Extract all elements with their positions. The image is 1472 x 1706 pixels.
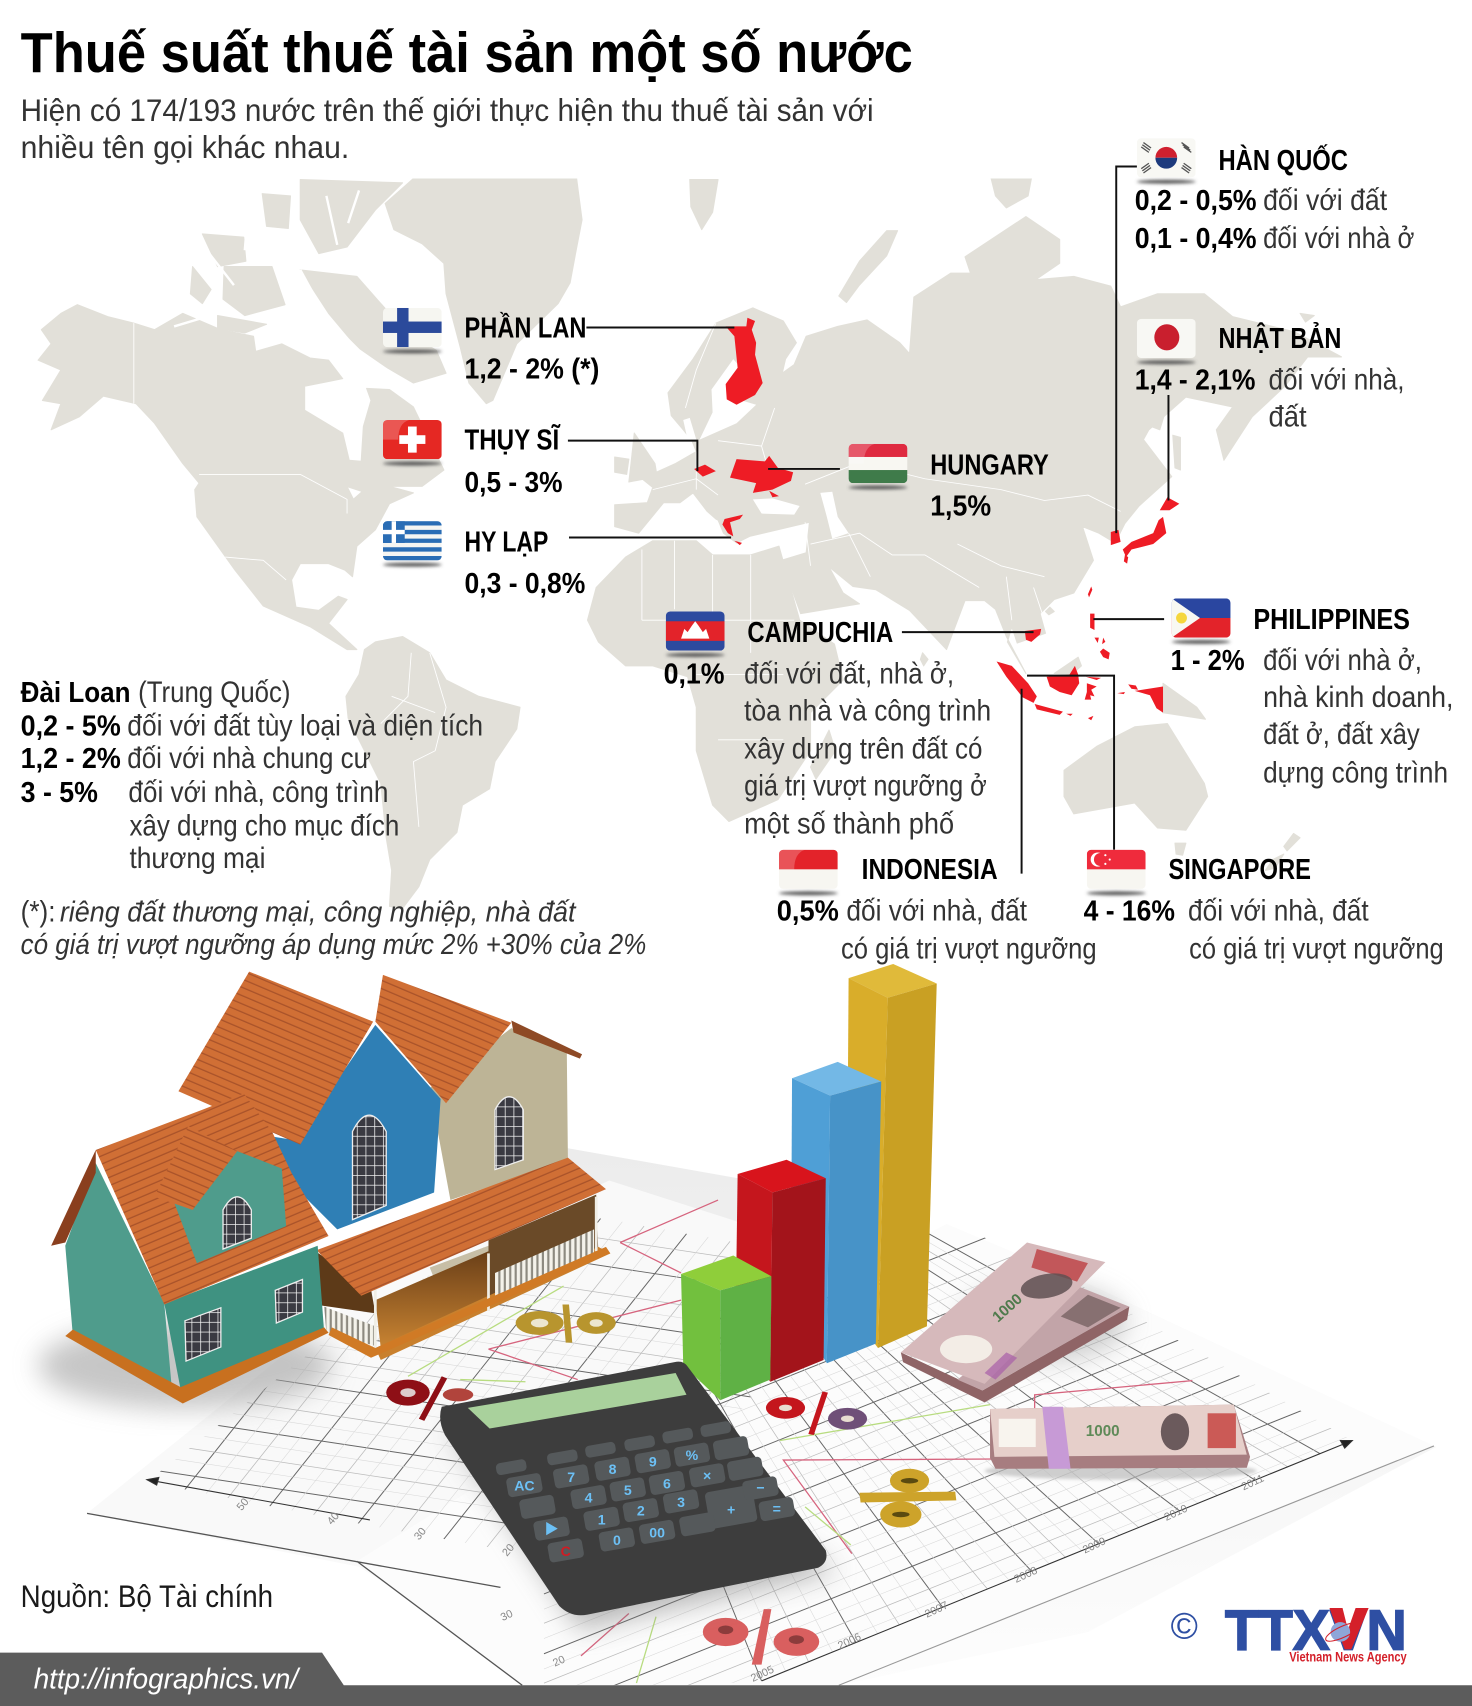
- gold percent centre: [859, 1469, 956, 1528]
- logo: TTXVN: [1171, 1598, 1407, 1664]
- panel: Hy Lạp: HY LẠP: [465, 526, 548, 558]
- panel: Nhật Bản: đất: [1269, 401, 1307, 434]
- subtitle: nhiều tên gọi khác nhau.: [21, 129, 349, 165]
- porch roof: [317, 1158, 606, 1296]
- flag: Philippines: [1172, 598, 1230, 644]
- right chart paper: [357, 1224, 1434, 1685]
- Cambodia: [1025, 629, 1041, 642]
- panel: Hungary: HUNGARY: [930, 448, 1049, 480]
- green house left wall: [65, 1163, 172, 1389]
- axis tick labels: 30: [499, 1608, 515, 1624]
- calculator key labels: C: [561, 1543, 571, 1559]
- dormer roof: [154, 1126, 237, 1210]
- banknotes: [901, 1242, 1257, 1480]
- axis tick labels: 2005: [749, 1664, 776, 1685]
- agency tagline: Vietnam News Agency: [1289, 1648, 1407, 1664]
- land: Australia, New Guinea and islands: [811, 607, 1300, 870]
- panel: Indonesia: có giá trị vượt ngưỡng: [841, 933, 1097, 966]
- calculator key labels: AC: [514, 1478, 535, 1494]
- axis tick labels: [235, 1473, 1266, 1685]
- panel: Philippines: đất ở, đất xây: [1263, 718, 1420, 751]
- panel: Đài Loan: xây dựng cho mục đích: [129, 810, 399, 843]
- gold percent near house: [516, 1305, 616, 1343]
- panel: Hungary: [849, 444, 1049, 522]
- subtitle: [21, 92, 874, 165]
- porch back left: [316, 1251, 375, 1313]
- porch railing left: [324, 1307, 375, 1346]
- calculator keys: [495, 1421, 796, 1563]
- panel: Phần Lan: 1,2 - 2% (*): [465, 353, 599, 385]
- left chart grid: [160, 1211, 752, 1551]
- footnote: (*):: [21, 896, 55, 929]
- Indonesia: [997, 662, 1163, 720]
- calculator key labels: ▶: [545, 1521, 559, 1537]
- axis tick labels: 2009: [1081, 1535, 1108, 1556]
- second main roof: [375, 975, 511, 1103]
- banknote shadow: [963, 1284, 1126, 1360]
- flag: Hungary: [849, 444, 907, 489]
- green house eave: [51, 1150, 96, 1246]
- footnote: riêng đất thương mại, công nghiệp, nhà đất: [60, 896, 577, 928]
- calculator key labels: 1: [598, 1511, 606, 1527]
- calculator key labels: 4: [585, 1490, 593, 1506]
- calculator body: [440, 1362, 827, 1615]
- panel: Hàn Quốc: 0,1 - 0,4%: [1135, 222, 1257, 254]
- left paper edges: [87, 1513, 522, 1685]
- panel: Đài Loan: Đài Loan: [21, 676, 131, 708]
- blue wing wall: [268, 1025, 441, 1229]
- flag: Switzerland: [383, 420, 442, 465]
- panel: Thụy Sĩ: 0,5 - 3%: [465, 466, 562, 498]
- panel: Hungary: 1,5%: [930, 490, 991, 522]
- source: Nguồn: Bộ Tài chính: [21, 1578, 273, 1614]
- panel: Indonesia: INDONESIA: [862, 853, 998, 885]
- axis tick labels: 2006: [836, 1631, 863, 1652]
- green house right wall: [164, 1246, 324, 1389]
- banknote bundle: [985, 1405, 1257, 1480]
- right paper edge: [839, 1446, 1434, 1685]
- red bar: [735, 1160, 826, 1382]
- panel: Campuchia: tòa nhà và công trình: [744, 694, 991, 727]
- Czech shape for Thụy Sĩ: [694, 465, 716, 477]
- South Korea: [1111, 530, 1121, 545]
- axis tick labels: 40: [325, 1510, 342, 1527]
- blue bar: [791, 1062, 881, 1363]
- land: islands of the north and Europe: [615, 178, 1314, 482]
- panel: Phần Lan: [383, 308, 599, 385]
- porch posts: [375, 1197, 596, 1349]
- Japan: [1123, 497, 1179, 564]
- axis tick labels: 2007: [923, 1599, 950, 1621]
- subtitle: Hiện có 174/193 nước trên thế giới thực hiện thu thuế tài sản với: [21, 92, 874, 128]
- footnote: có giá trị vượt ngưỡng áp dụng mức 2% +30% của 2%: [21, 928, 646, 960]
- panel: Hy Lạp: 0,3 - 0,8%: [465, 567, 585, 599]
- panel: Nhật Bản: [1135, 319, 1405, 434]
- panel: Nhật Bản: NHẬT BẢN: [1219, 322, 1341, 354]
- axis tick labels: 50: [235, 1496, 252, 1513]
- arctic channels: [174, 190, 387, 368]
- dormer wall: [174, 1151, 286, 1263]
- porch room wall: [430, 1246, 488, 1295]
- panel: Philippines: nhà kinh doanh,: [1263, 681, 1454, 714]
- flag: Cambodia: [666, 611, 725, 657]
- panel: Singapore: SINGAPORE: [1168, 853, 1311, 885]
- roof ridge and eave of beige wing: [511, 1021, 582, 1059]
- panel: Campuchia: 0,1%: [664, 657, 725, 689]
- house illustration: [38, 972, 610, 1409]
- panel: Thụy Sĩ: [383, 420, 562, 498]
- fanned banknotes: 1000: [989, 1291, 1026, 1326]
- axis tick labels: 20: [500, 1542, 517, 1559]
- flag: Indonesia: [779, 850, 838, 895]
- calculator screen: [468, 1373, 686, 1429]
- panel: Hàn Quốc: đối với đất: [1263, 184, 1387, 217]
- panel: Hàn Quốc: [1135, 138, 1414, 255]
- window: blue wing arch: [352, 1115, 386, 1220]
- sea cut-outs: [348, 359, 849, 539]
- calculator key labels: −: [756, 1480, 765, 1496]
- axis tick labels: 2008: [1012, 1565, 1039, 1586]
- chart axis arrows: [147, 1440, 1352, 1681]
- footer band: [0, 1653, 1472, 1706]
- calculator key labels: 6: [663, 1475, 671, 1491]
- calculator key labels: 5: [624, 1482, 632, 1498]
- calculator key labels: 9: [649, 1454, 657, 1470]
- panel: Philippines: [1171, 598, 1454, 789]
- panel: Campuchia: đối với đất, nhà ở,: [744, 657, 954, 690]
- flag: South Korea: [1137, 138, 1196, 184]
- bar chart: [681, 964, 937, 1400]
- panel: Đài Loan: đối với đất tùy loại và diện tích: [127, 710, 483, 743]
- land: Greenland: [385, 178, 582, 404]
- panel: Hàn Quốc: đối với nhà ở: [1263, 222, 1414, 255]
- footer url: http://infographics.vn/: [34, 1663, 301, 1695]
- axis tick labels: 20: [551, 1654, 567, 1670]
- panel: Philippines: 1 - 2%: [1171, 644, 1245, 676]
- panel: Đài Loan: thương mại: [129, 842, 265, 875]
- percent signs: [386, 1305, 956, 1665]
- panel: Đài Loan: đối với nhà chung cư: [127, 742, 371, 775]
- porch back right room: [488, 1195, 598, 1300]
- flag: Japan: [1137, 319, 1196, 364]
- dark red percent: [386, 1376, 473, 1421]
- agency wordmark: TTXVN: [1225, 1598, 1407, 1661]
- flag: Singapore: [1087, 850, 1146, 895]
- banknote bundle: 1000: [1086, 1423, 1120, 1440]
- house shadow: [38, 1322, 332, 1409]
- calculator key labels: =: [773, 1500, 781, 1516]
- calculator key labels: +: [727, 1501, 735, 1517]
- panel: Hàn Quốc: HÀN QUỐC: [1219, 144, 1348, 176]
- calculator key labels: 7: [567, 1469, 575, 1485]
- porch railing right: [495, 1229, 594, 1296]
- calculator shadow: [446, 1425, 838, 1630]
- leader lines: [568, 167, 1168, 874]
- calculator key labels: 8: [609, 1461, 617, 1477]
- panel: Indonesia: đối với nhà, đất: [846, 894, 1027, 927]
- panel: Indonesia: [777, 850, 1097, 966]
- globe emblem: [1323, 1608, 1369, 1649]
- calculator key labels: ×: [703, 1468, 711, 1484]
- first main roof: [178, 972, 373, 1145]
- panel: Hàn Quốc: 0,2 - 0,5%: [1135, 184, 1257, 216]
- green bar: [681, 1256, 771, 1400]
- copyright mark: ©: [1171, 1606, 1198, 1647]
- panel: Đài Loan: [21, 676, 483, 875]
- calculator key labels: %: [686, 1447, 699, 1463]
- red and purple percent: [766, 1392, 867, 1435]
- panel: Campuchia: CAMPUCHIA: [747, 616, 893, 648]
- window: lower left: [185, 1308, 221, 1361]
- panel: Philippines: PHILIPPINES: [1253, 603, 1410, 635]
- land: North America: [38, 305, 444, 650]
- window: beige wing arch: [495, 1097, 523, 1170]
- green house base: [65, 1327, 329, 1404]
- land: Eurasia: [615, 217, 1341, 673]
- land: Africa: [587, 541, 843, 821]
- Finland: [726, 318, 763, 405]
- highlighted countries on the map: [694, 318, 1179, 720]
- flag: Greece: [383, 521, 442, 567]
- calculator key labels: [514, 1447, 781, 1559]
- pink percent bottom: [703, 1609, 819, 1665]
- panel: Philippines: dựng công trình: [1263, 756, 1448, 789]
- porch floor: [375, 1251, 488, 1348]
- window: lower right: [275, 1279, 302, 1323]
- Philippines: [1090, 614, 1110, 659]
- panel: Đài Loan: 0,2 - 5%: [21, 710, 121, 742]
- table surface: [87, 1148, 1436, 1685]
- panel: Phần Lan: PHẦN LAN: [465, 311, 586, 343]
- green house roof: [96, 1093, 329, 1305]
- panel: Đài Loan: 3 - 5%: [21, 776, 98, 808]
- chart trend lines: [408, 1200, 1192, 1683]
- panel: Đài Loan: đối với nhà, công trình: [128, 776, 388, 809]
- flag: Finland: [383, 308, 442, 353]
- panel: Đài Loan: (Trung Quốc): [138, 676, 290, 709]
- panel: Singapore: 4 - 16%: [1084, 894, 1175, 926]
- Taiwan: [1088, 586, 1092, 597]
- panel: Campuchia: [664, 611, 991, 840]
- window: dormer arch: [223, 1197, 251, 1249]
- fanned banknotes: [901, 1242, 1129, 1402]
- illustration: table and chart paper: [86, 1148, 1435, 1686]
- world map: [38, 178, 1341, 908]
- porch floor edge: [375, 1247, 610, 1360]
- axis tick labels: 30: [412, 1526, 429, 1543]
- calculator key labels: 2: [637, 1503, 645, 1519]
- panel: Singapore: đối với nhà, đất: [1188, 894, 1369, 927]
- panel: Campuchia: giá trị vượt ngưỡng ở: [744, 769, 987, 802]
- country borders: [134, 323, 1121, 827]
- footnote: [21, 896, 646, 960]
- panel: Indonesia: 0,5%: [777, 894, 839, 926]
- panel: Thụy Sĩ: THỤY SĨ: [465, 423, 561, 455]
- beige wing wall: [430, 1028, 568, 1200]
- panel: Đài Loan: 1,2 - 2%: [21, 742, 121, 774]
- title: Thuế suất thuế tài sản một số nước: [21, 21, 913, 84]
- Greece: [722, 515, 743, 545]
- axis tick labels: 2011: [1240, 1473, 1266, 1493]
- calculator key labels: 0: [613, 1532, 621, 1548]
- calculator: [440, 1362, 838, 1630]
- panel: Philippines: đối với nhà ở,: [1263, 644, 1422, 677]
- left chart paper: [87, 1180, 762, 1599]
- panel: Hy Lạp: [383, 521, 585, 599]
- porch base: [329, 1247, 610, 1358]
- right chart grid: [544, 1234, 1347, 1686]
- panel: Nhật Bản: đối với nhà,: [1269, 364, 1405, 397]
- panel: Campuchia: xây dựng trên đất có: [744, 732, 982, 765]
- panel: Singapore: [1084, 850, 1444, 966]
- panel: Campuchia: một số thành phố: [744, 807, 954, 840]
- axis tick labels: 2010: [1162, 1503, 1189, 1524]
- yellow bar: [846, 964, 937, 1348]
- panel: Nhật Bản: 1,4 - 2,1%: [1135, 364, 1255, 396]
- land: South America: [346, 636, 520, 908]
- land: Canadian Arctic islands: [190, 180, 446, 383]
- calculator key labels: 00: [649, 1524, 665, 1540]
- Hungary highlighted shape: [730, 456, 793, 497]
- calculator key labels: 3: [677, 1494, 685, 1510]
